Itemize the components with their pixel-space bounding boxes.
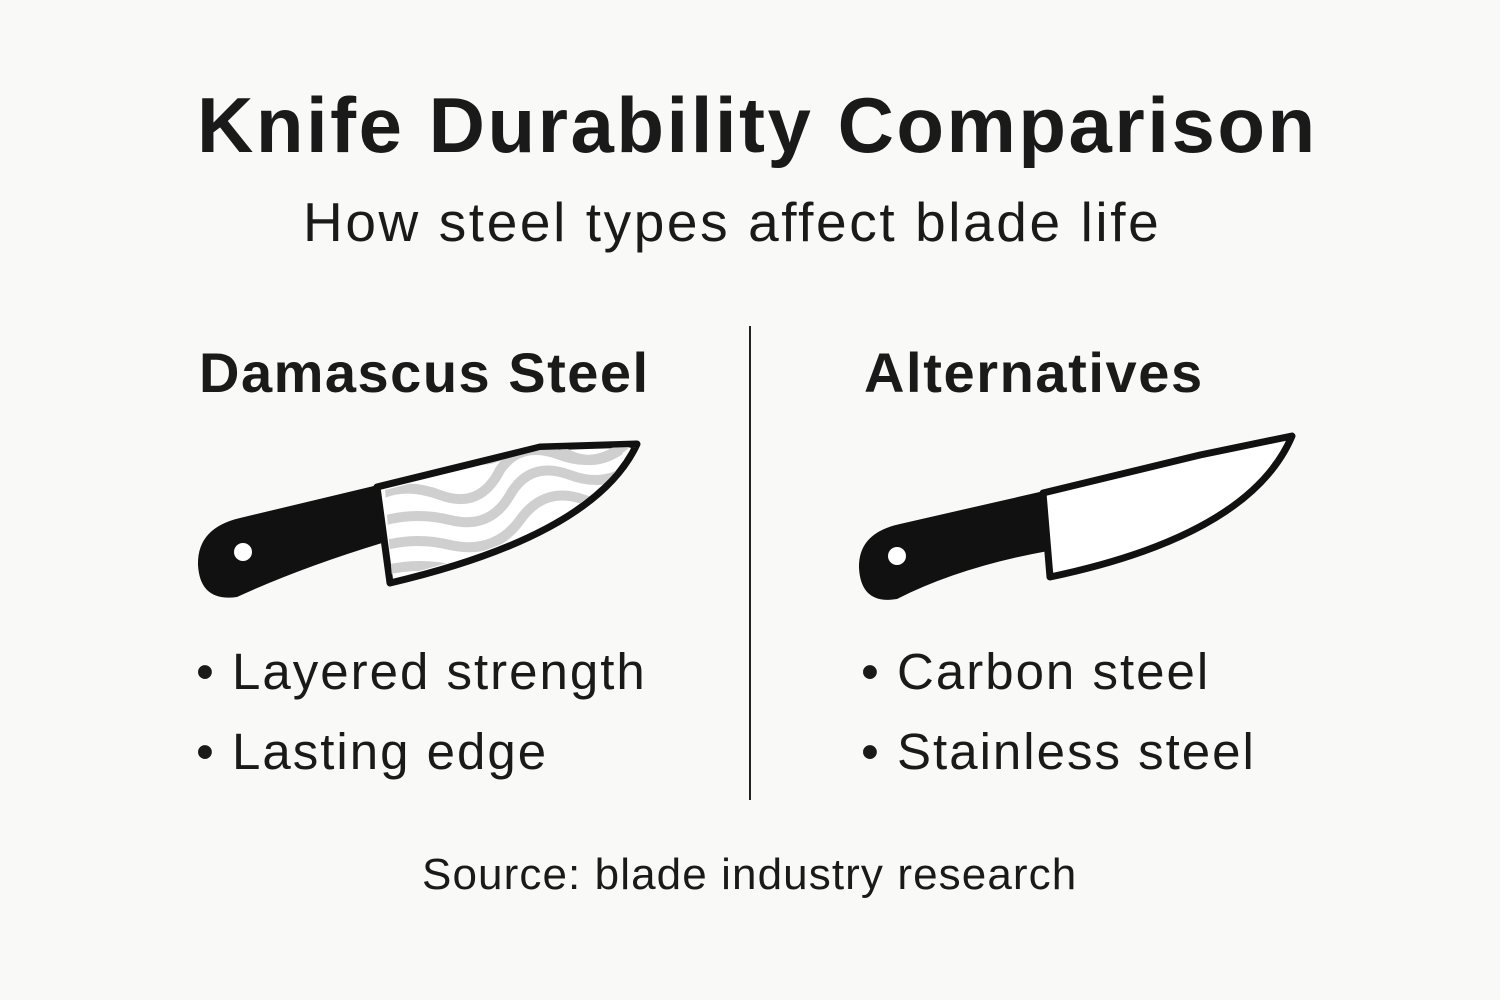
- heading: alternatives: Alternatives: [864, 341, 1204, 404]
- bullets: alternatives: • Stainless steel: [861, 723, 1256, 780]
- title: Knife Durability Comparison: [197, 81, 1318, 169]
- subtitle: How steel types affect blade life: [303, 191, 1161, 253]
- panel: damascus: [196, 341, 650, 780]
- icon: damascus knife: [198, 440, 640, 598]
- bullets: damascus: [196, 643, 647, 780]
- bullets: damascus: • Lasting edge: [196, 723, 548, 780]
- source: Source: blade industry research: [422, 850, 1077, 899]
- panel: alternatives: [861, 341, 1256, 780]
- bullets: alternatives: [861, 643, 1256, 780]
- bullets: alternatives: • Carbon steel: [861, 643, 1210, 700]
- heading: damascus: Damascus Steel: [199, 341, 650, 404]
- bullets: damascus: • Layered strength: [196, 643, 647, 700]
- divider: [749, 326, 751, 800]
